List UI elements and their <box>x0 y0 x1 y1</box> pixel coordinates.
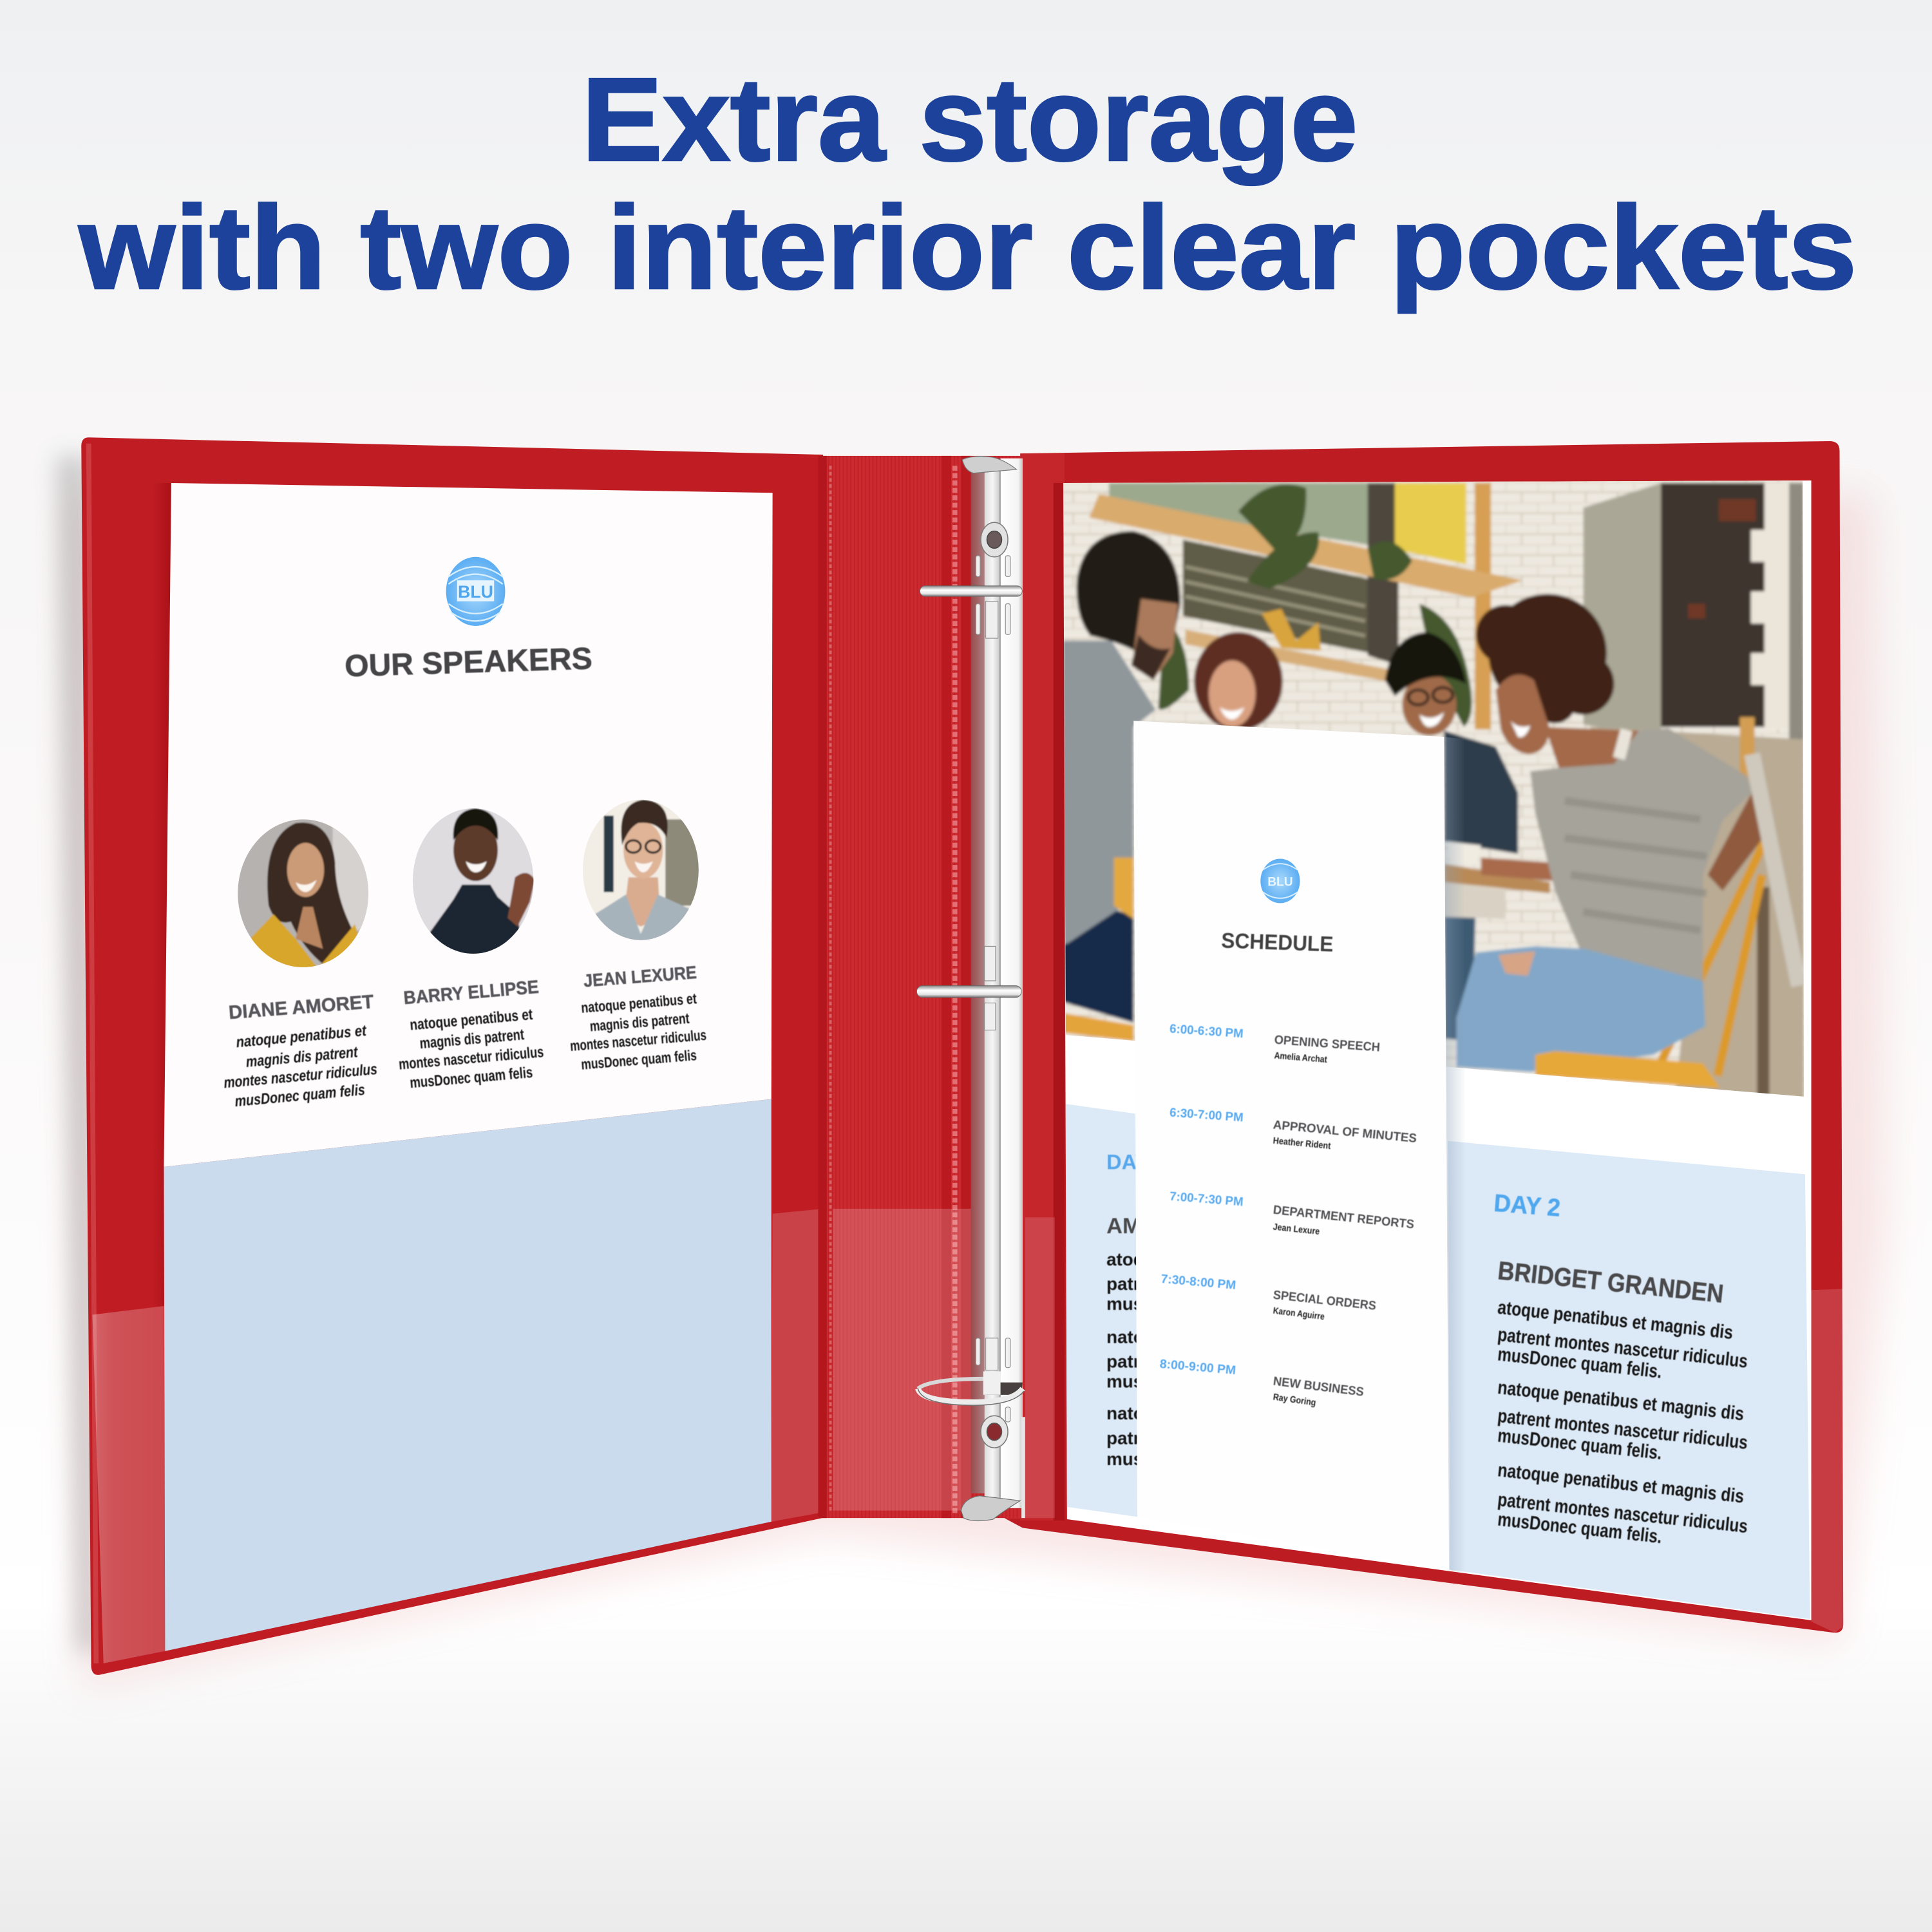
schedule times: 6:30-7:00 PM <box>1169 1106 1244 1124</box>
day 1 panel: natoque <box>1106 1327 1176 1347</box>
schedule card shadow <box>1444 737 1466 1575</box>
right page sheet <box>1059 478 1811 1620</box>
speaker: Jean Lexure: montes nascetur ridiculus <box>569 1027 707 1054</box>
speaker: Barry Ellipse: montes nascetur ridiculus <box>398 1043 544 1074</box>
logo: BLU small <box>1260 859 1300 903</box>
day 1 panel: AMELIA <box>1106 1214 1191 1238</box>
day 1 panel: patrent <box>1106 1352 1167 1372</box>
photo: friends at cafe <box>1059 478 1811 1103</box>
portrait: Barry Ellipse <box>413 808 533 954</box>
speaker: Barry Ellipse <box>398 977 544 1092</box>
portrait: Jean Lexure <box>583 800 699 940</box>
title <box>78 53 1857 314</box>
schedule items: Amelia Archat <box>1274 1051 1327 1065</box>
photo subject: man left <box>1062 903 1133 1023</box>
body text: day 2: natoque penatibus et magnis dis <box>1497 1459 1745 1508</box>
panel: schedule card <box>1133 721 1449 1570</box>
logo: BLU small: BLU <box>1267 876 1293 889</box>
day 1 panel: patrent <box>1106 1274 1167 1294</box>
ring 2 <box>916 986 1021 998</box>
heading: Bridget Granden: BRIDGET GRANDEN <box>1497 1256 1725 1309</box>
day 1 panel: patrent <box>1106 1428 1167 1448</box>
body text: day 2: patrent montes nascetur ridiculus <box>1497 1405 1748 1454</box>
body text: day 2: patrent montes nascetur ridiculus <box>1497 1489 1748 1537</box>
speaker: Barry Ellipse: BARRY ELLIPSE <box>402 977 540 1009</box>
clear sleeve <box>971 471 985 1493</box>
day 1 panel: musDonec <box>1106 1449 1198 1469</box>
body text: day 2: musDonec quam felis. <box>1497 1509 1663 1548</box>
body text: day 2: patrent montes nascetur ridiculus <box>1497 1324 1748 1372</box>
body text: day 2: natoque penatibus et magnis dis <box>1497 1377 1745 1425</box>
panel: right cover <box>1004 441 1844 1633</box>
schedule items: DEPARTMENT REPORTS <box>1273 1204 1415 1232</box>
speaker: Barry Ellipse: natoque penatibus et <box>409 1006 533 1034</box>
speaker: Barry Ellipse: musDonec quam felis <box>409 1064 533 1092</box>
speaker: Diane Amoret: magnis dis patrent <box>245 1043 359 1071</box>
day 1 panel: musDonec <box>1106 1294 1198 1314</box>
title: Extra storage <box>582 53 1358 185</box>
schedule times: 7:30-8:00 PM <box>1160 1273 1236 1293</box>
photo subject: man with hat <box>1444 731 1518 854</box>
rivet: bottom <box>981 1416 1008 1448</box>
rivet: top <box>981 522 1008 557</box>
speaker: Diane Amoret: montes nascetur ridiculus <box>223 1061 378 1092</box>
plate end caps <box>961 457 1020 1521</box>
schedule items: SPECIAL ORDERS <box>1273 1289 1377 1313</box>
photo subject: woman centre <box>1194 632 1283 731</box>
panel: spine <box>818 456 1025 1518</box>
clear pocket: spine strip <box>833 1209 971 1511</box>
portrait: Diane Amoret <box>238 819 368 967</box>
schedule items: Karon Aguirre <box>1273 1306 1325 1322</box>
left page: our speakers sheet <box>164 483 773 1651</box>
day 2 panel <box>1448 1141 1810 1619</box>
schedule items: Jean Lexure <box>1273 1222 1320 1237</box>
day 1 panel: musDonec <box>1106 1371 1198 1391</box>
schedule times <box>1159 1022 1244 1378</box>
body text: day 2 <box>1497 1297 1748 1548</box>
schedule times: 6:00-6:30 PM <box>1169 1022 1244 1041</box>
ring 3 <box>918 1371 1024 1405</box>
ring tabs <box>976 556 1010 1422</box>
schedule items: Heather Rident <box>1273 1136 1331 1151</box>
speaker: Jean Lexure <box>569 962 707 1073</box>
left pocket blue sheet <box>164 1099 772 1651</box>
speaker: Jean Lexure: natoque penatibus et <box>580 990 697 1016</box>
panel: left cover <box>81 437 828 1675</box>
heading: our speakers: OUR SPEAKERS <box>344 641 592 683</box>
photo: table and cup <box>1444 864 1550 893</box>
clear pocket: left cover outer strip <box>92 1306 165 1663</box>
logo: BLU: BLU <box>458 582 493 601</box>
speaker: Jean Lexure: magnis dis patrent <box>589 1010 690 1034</box>
day 1 panel: DAY 1 <box>1106 1151 1166 1174</box>
clear pocket: right cover outer strip <box>1811 1289 1844 1633</box>
speaker: Jean Lexure: musDonec quam felis <box>580 1046 697 1073</box>
open binder <box>81 437 1844 1675</box>
heading: day 2: DAY 2 <box>1493 1189 1562 1222</box>
schedule items: OPENING SPEECH <box>1274 1034 1381 1055</box>
speaker: Diane Amoret: musDonec quam felis <box>234 1081 366 1110</box>
schedule items <box>1273 1034 1417 1408</box>
speaker: Diane Amoret <box>223 991 378 1110</box>
speaker: Barry Ellipse: magnis dis patrent <box>419 1026 525 1052</box>
day 1 panel: natoque <box>1106 1403 1176 1423</box>
schedule items: Ray Goring <box>1273 1392 1316 1408</box>
day 1 panel: atoque <box>1106 1249 1165 1269</box>
ring 1 <box>920 586 1022 596</box>
schedule times: 8:00-9:00 PM <box>1159 1358 1236 1378</box>
schedule items: NEW BUSINESS <box>1273 1375 1365 1399</box>
body text: day 2: musDonec quam felis. <box>1497 1425 1663 1464</box>
speaker: Diane Amoret: natoque penatibus et <box>235 1022 368 1051</box>
speaker: Jean Lexure: JEAN LEXURE <box>583 962 697 991</box>
body text: day 2: musDonec quam felis. <box>1497 1343 1663 1383</box>
schedule times: 7:00-7:30 PM <box>1169 1190 1244 1209</box>
metal plate <box>985 459 1025 1518</box>
title: with two interior clear pockets <box>78 182 1857 314</box>
schedule items: APPROVAL OF MINUTES <box>1273 1119 1417 1146</box>
clear pocket: left cover inner strip <box>772 1209 826 1522</box>
logo: BLU <box>446 557 505 626</box>
body text: day 2: atoque penatibus et magnis dis <box>1497 1297 1734 1343</box>
day 1 panel <box>1066 1104 1198 1518</box>
ring mechanism <box>916 457 1025 1521</box>
heading: schedule: SCHEDULE <box>1221 929 1334 956</box>
speaker: Diane Amoret: DIANE AMORET <box>228 991 375 1023</box>
photo subject: woman right <box>1654 842 1765 1078</box>
binder shadow glow <box>57 456 1885 1688</box>
clear pocket: right cover inner strip <box>1025 1217 1055 1518</box>
